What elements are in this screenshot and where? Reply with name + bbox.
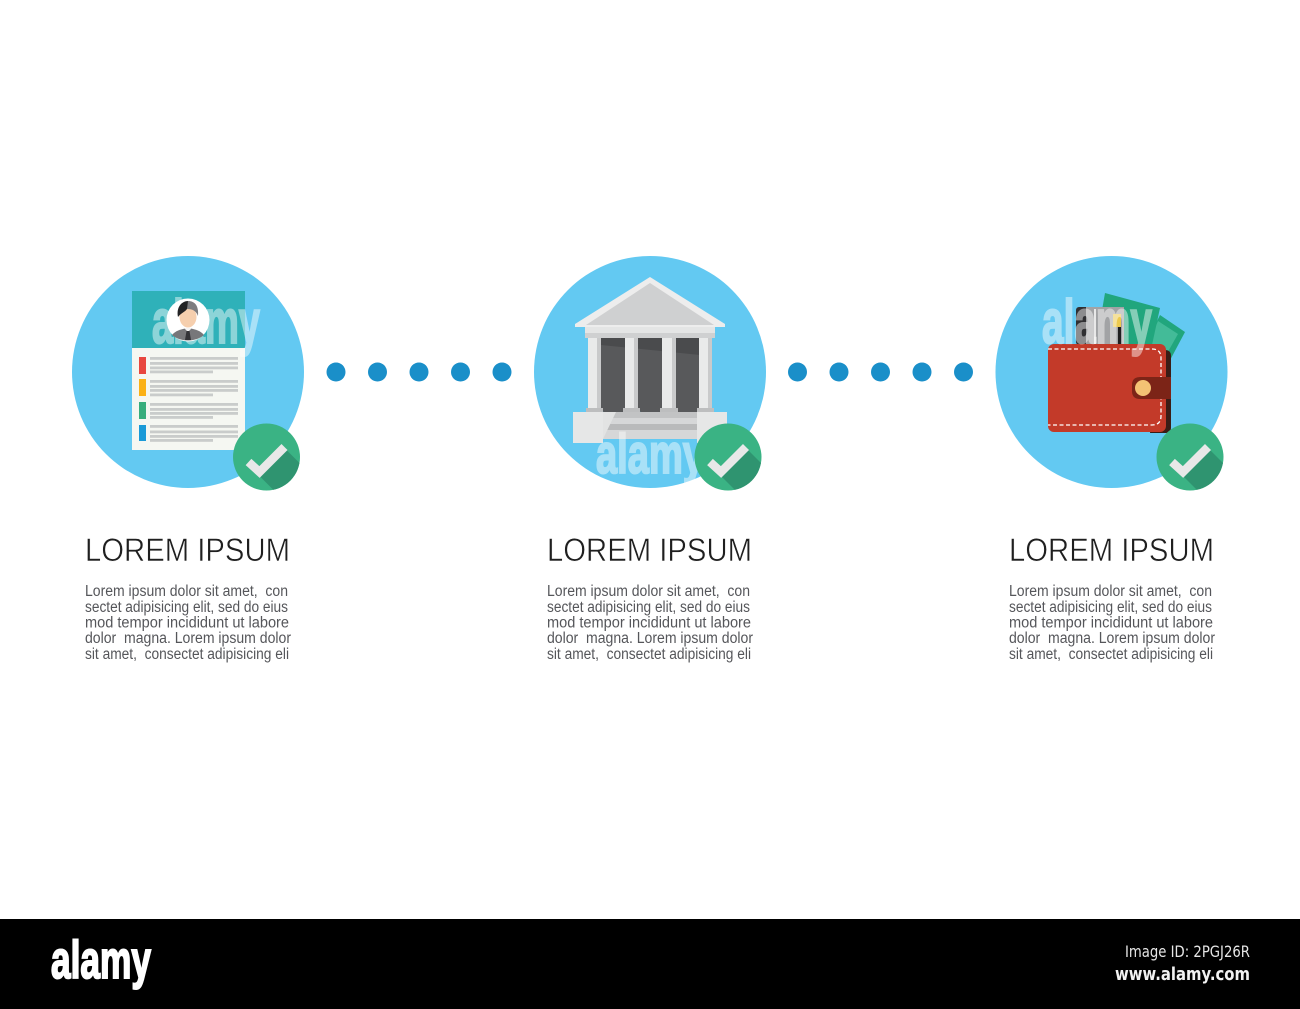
body text 2: sit amet, consectet adipisicing eli xyxy=(547,646,751,663)
icon: check badge 2 xyxy=(694,424,762,490)
icon: resume document xyxy=(132,291,245,450)
blue circle 2 xyxy=(534,256,766,488)
dotted connector 1 xyxy=(326,362,512,382)
body text 1: mod tempor incididunt ut labore xyxy=(85,614,289,632)
avatar portrait xyxy=(166,298,210,342)
body text 1: sit amet, consectet adipisicing eli xyxy=(85,646,289,663)
footer logo: alamy xyxy=(51,931,151,990)
icon: check badge 3 xyxy=(1156,424,1224,490)
body text 2: sectet adipisicing elit, sed do eius xyxy=(547,599,750,616)
blue circle 3 xyxy=(996,256,1228,488)
image id: Image ID: 2PGJ26R xyxy=(1125,942,1250,961)
icon: bank building xyxy=(573,277,727,443)
body text 2: mod tempor incididunt ut labore xyxy=(547,614,751,632)
body text 3: dolor magna. Lorem ipsum dolor xyxy=(1009,630,1215,647)
heading 2: LOREM IPSUM xyxy=(547,532,752,568)
body text 2 xyxy=(547,583,753,663)
body text 1: dolor magna. Lorem ipsum dolor xyxy=(85,630,291,647)
panel: step 1 resume icon xyxy=(72,256,304,490)
text block: column 3 xyxy=(1009,532,1215,663)
blue circle 1 xyxy=(72,256,304,488)
body text 3: mod tempor incididunt ut labore xyxy=(1009,614,1213,632)
text block: column 1 xyxy=(85,532,291,663)
watermark 2: alamy xyxy=(596,422,704,485)
panel: step 3 wallet icon xyxy=(996,256,1228,490)
footer bar xyxy=(0,919,1300,1009)
body text 1: sectet adipisicing elit, sed do eius xyxy=(85,599,288,616)
website: www.alamy.com xyxy=(1115,965,1250,985)
dotted connector 2 xyxy=(788,362,973,382)
body text 3: sectet adipisicing elit, sed do eius xyxy=(1009,599,1212,616)
watermark 3: alamy xyxy=(1042,288,1152,357)
panel: step 2 bank icon xyxy=(534,256,766,490)
watermark 1: alamy xyxy=(152,288,260,357)
body text 3 xyxy=(1009,583,1215,663)
body text 2: dolor magna. Lorem ipsum dolor xyxy=(547,630,753,647)
icon: wallet xyxy=(1048,293,1185,433)
body text 3: sit amet, consectet adipisicing eli xyxy=(1009,646,1213,663)
body text 2: Lorem ipsum dolor sit amet, con xyxy=(547,583,750,600)
body text 1 xyxy=(85,583,291,663)
body text 3: Lorem ipsum dolor sit amet, con xyxy=(1009,583,1212,600)
body text 1: Lorem ipsum dolor sit amet, con xyxy=(85,583,288,600)
heading 3: LOREM IPSUM xyxy=(1009,532,1214,568)
icon: check badge 1 xyxy=(233,424,300,490)
heading 1: LOREM IPSUM xyxy=(85,532,290,568)
text block: column 2 xyxy=(547,532,753,663)
